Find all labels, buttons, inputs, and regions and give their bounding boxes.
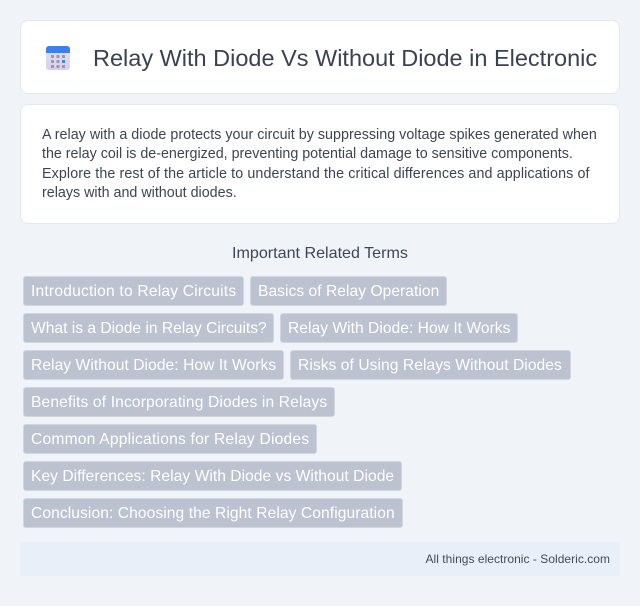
- intro paragraph: the relay coil is de-energized, preventing potential damage to sensitive components.: [42, 146, 573, 162]
- section heading: Important Related Terms: [232, 244, 408, 262]
- intro paragraph: relays with and without diodes.: [42, 185, 237, 201]
- title: Relay With Diode Vs Without Diode in Electronic: [93, 45, 597, 71]
- related term tags: Introduction to Relay Circuits: [31, 283, 236, 300]
- related term tags: Relay With Diode: How It Works: [288, 320, 510, 337]
- intro paragraph: Explore the rest of the article to understand the critical differences and applications of: [42, 166, 590, 182]
- intro paragraph: A relay with a diode protects your circuit by suppressing voltage spikes generated when: [42, 127, 597, 143]
- title card: [20, 20, 620, 94]
- related term tags: Relay Without Diode: How It Works: [31, 357, 276, 374]
- related term tags: Benefits of Incorporating Diodes in Relays: [31, 394, 327, 411]
- footer bar: [20, 542, 620, 576]
- related term tags: Basics of Relay Operation: [258, 283, 439, 300]
- related term tags: Conclusion: Choosing the Right Relay Configuration: [31, 505, 395, 522]
- intro text panel: [20, 104, 620, 224]
- icon: calendar: [46, 46, 70, 70]
- intro paragraph: [42, 127, 597, 201]
- related term tags: Key Differences: Relay With Diode vs Without Diode: [31, 468, 394, 485]
- related term tags: Common Applications for Relay Diodes: [31, 431, 309, 448]
- related term tags: Risks of Using Relays Without Diodes: [298, 357, 562, 374]
- footer bar: All things electronic - Solderic.com: [426, 552, 610, 566]
- related term tags: What is a Diode in Relay Circuits?: [31, 320, 267, 337]
- related term tags: [23, 276, 571, 528]
